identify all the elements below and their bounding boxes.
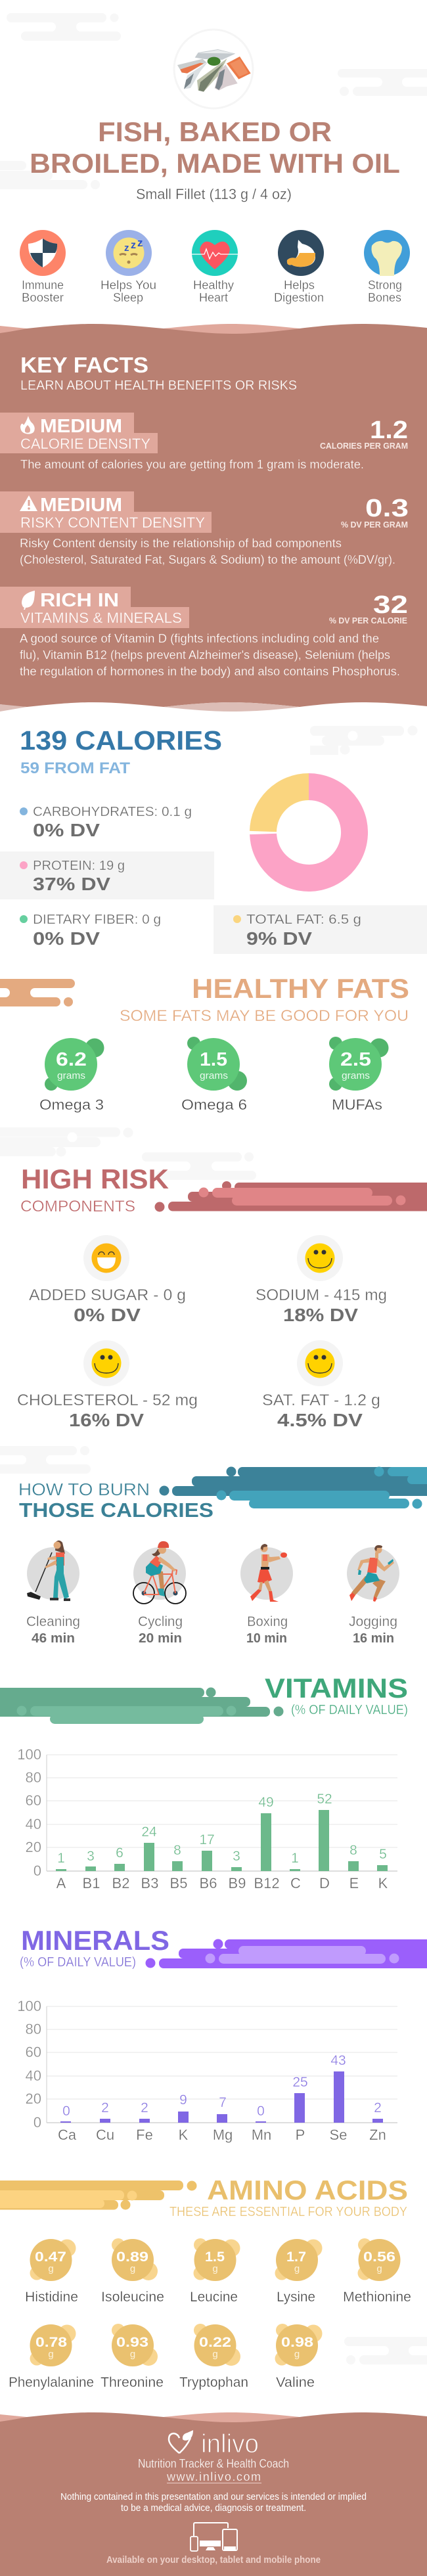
serving size: Small Fillet (113 g / 4 oz) xyxy=(136,186,292,202)
fat: mufas: 2.5 xyxy=(340,1049,371,1070)
risk: cholesterol: CHOLESTEROL - 52 mg xyxy=(17,1391,198,1409)
subheading: key facts: LEARN ABOUT HEALTH BENEFITS OR RISKS xyxy=(20,378,297,393)
panel: how to burn those calories xyxy=(18,1466,427,1646)
amino: valine: g xyxy=(294,2349,300,2360)
amino: histidine xyxy=(25,2239,78,2305)
bar chart: minerals: 43 xyxy=(330,2053,346,2068)
icon: helps you sleep face: z xyxy=(131,240,136,251)
legend: protein: 37% DV xyxy=(33,874,110,894)
amino: valine: 0.98 xyxy=(281,2335,313,2350)
bar chart: minerals: 7 xyxy=(219,2095,227,2110)
bar chart: minerals: 20 xyxy=(26,2090,41,2107)
banner: minerals xyxy=(146,1939,427,1968)
bar chart: minerals: 60 xyxy=(26,2044,41,2060)
amino: phenylalanine: g xyxy=(48,2349,54,2360)
bar chart: minerals: 0 xyxy=(34,2114,41,2131)
risk: added sugar: 0% DV xyxy=(74,1305,141,1325)
bar chart: minerals: Se xyxy=(330,2127,347,2143)
bar chart: vitamins: 1 xyxy=(57,1851,65,1866)
amino: lysine: g xyxy=(294,2263,300,2274)
amino: threonine: 0.93 xyxy=(116,2335,148,2350)
bar chart: minerals: 25 xyxy=(292,2075,308,2090)
amino: histidine: g xyxy=(48,2263,54,2274)
subheading: components: COMPONENTS xyxy=(20,1198,135,1215)
bar chart: vitamins: 6 xyxy=(116,1845,124,1861)
activity: cycling: Cycling xyxy=(138,1614,183,1629)
fat: mufas: MUFAs xyxy=(332,1096,382,1113)
bar chart: vitamins: B2 xyxy=(112,1875,129,1891)
bar chart: vitamins: B9 xyxy=(229,1875,246,1891)
bar chart: minerals: 0 xyxy=(62,2104,70,2119)
panel: key facts xyxy=(0,324,427,712)
subheading: healthy fats: SOME FATS MAY BE GOOD FOR YOU xyxy=(120,1007,409,1025)
bar chart: vitamins: K xyxy=(378,1875,388,1891)
panel: amino acids xyxy=(0,2175,411,2390)
activity: cleaning: Cleaning xyxy=(26,1614,80,1629)
amino: threonine: g xyxy=(130,2349,135,2360)
legend: dietary fiber xyxy=(20,913,161,949)
bar chart: vitamins: 5 xyxy=(379,1847,387,1862)
amino: histidine: 0.47 xyxy=(35,2249,66,2265)
risk: saturated fat: SAT. FAT - 1.2 g xyxy=(262,1391,380,1409)
activity: boxing: Boxing xyxy=(247,1614,288,1629)
icon: strong bones xyxy=(364,230,410,304)
fact: calorie density: The amount of calories you are getting from 1 gram is moderate. xyxy=(20,458,364,471)
fact: calorie density xyxy=(0,413,408,471)
activity: boxing xyxy=(240,1544,293,1646)
amino: methionine: g xyxy=(376,2263,382,2274)
banner: amino acids xyxy=(0,2181,197,2210)
icon: helps digestion stomach: Helps xyxy=(284,279,315,292)
amino: tryptophan: Tryptophan xyxy=(179,2375,248,2390)
bar chart: vitamins: B1 xyxy=(83,1875,100,1891)
donut chart xyxy=(250,773,368,892)
subheading: amino acids: THESE ARE ESSENTIAL FOR YOUR BODY xyxy=(169,2205,407,2219)
bar chart: minerals: P xyxy=(296,2127,305,2143)
bar chart: vitamins xyxy=(17,1746,397,1891)
title xyxy=(30,116,400,179)
risk: sodium: SODIUM - 415 mg xyxy=(256,1286,387,1304)
icon: strong bones: Strong xyxy=(368,279,402,292)
risk: cholesterol xyxy=(17,1340,198,1430)
banner: healthy fats xyxy=(0,979,76,1006)
amino: valine xyxy=(275,2324,322,2390)
fat: omega 6: 1.5 xyxy=(200,1049,227,1070)
heading: high risk: HIGH RISK xyxy=(21,1164,169,1194)
amino: lysine xyxy=(275,2239,322,2305)
subheading: percent of daily value: (% OF DAILY VALUE) xyxy=(291,1703,408,1717)
amino: lysine: 1.7 xyxy=(286,2249,306,2265)
amino: histidine: Histidine xyxy=(25,2290,78,2305)
disclaimer: Nothing contained in this presentation and our services is intended or implied xyxy=(60,2491,367,2502)
bar chart: vitamins: 8 xyxy=(173,1843,181,1858)
icon: helps you sleep face: z xyxy=(137,237,143,249)
risk: sodium: 18% DV xyxy=(283,1305,358,1325)
amino: leucine: g xyxy=(212,2263,218,2274)
heading: key facts: KEY FACTS xyxy=(20,353,148,377)
bar chart: vitamins: B6 xyxy=(200,1875,217,1891)
fact: rich in vitamins and minerals: VITAMINS & MINERALS xyxy=(20,610,182,626)
panel: vitamins xyxy=(0,1673,408,1891)
fact: calorie density: CALORIES PER GRAM xyxy=(320,441,408,451)
fat: mufas xyxy=(329,1037,389,1113)
fat: omega 3: Omega 3 xyxy=(39,1096,104,1113)
bar chart: vitamins: B12 xyxy=(254,1875,280,1891)
fact: risky content density: MEDIUM xyxy=(40,495,122,516)
activity: jogging: Jogging xyxy=(349,1614,397,1629)
legend: protein: PROTEIN: 19 g xyxy=(33,859,125,873)
bar chart: vitamins: 3 xyxy=(87,1849,95,1864)
bar chart: vitamins: 24 xyxy=(141,1824,157,1840)
amino: tryptophan: 0.22 xyxy=(199,2335,231,2350)
bar chart: vitamins: 40 xyxy=(26,1816,41,1832)
panel: healthy fats xyxy=(0,973,409,1113)
logo: inlivo heart xyxy=(169,2429,259,2458)
bar chart: minerals: 100 xyxy=(17,1998,41,2014)
amino: methionine: Methionine xyxy=(343,2290,411,2305)
bar chart: minerals: 2 xyxy=(141,2100,148,2115)
disclaimer xyxy=(60,2491,367,2514)
legend: carbohydrates xyxy=(20,805,192,840)
bar chart: minerals: Mn xyxy=(252,2127,271,2143)
activity: cleaning: 46 min xyxy=(32,1631,75,1646)
fact: rich in vitamins and minerals: flu), Vitamin B12 (helps prevent Alzheimer's disease), Selenium (helps xyxy=(20,648,390,662)
bar chart: vitamins: 60 xyxy=(26,1792,41,1809)
title: BROILED, MADE WITH OIL xyxy=(30,148,400,179)
amino: phenylalanine xyxy=(9,2324,94,2390)
fat: omega 3 xyxy=(39,1038,104,1113)
bar chart: minerals: Ca xyxy=(58,2127,77,2143)
legend: protein xyxy=(0,851,214,899)
risk: sodium xyxy=(256,1235,387,1325)
bar chart: vitamins: C xyxy=(290,1875,301,1891)
legend: total fat: 9% DV xyxy=(246,928,312,949)
amino: leucine: Leucine xyxy=(190,2290,238,2305)
icon: immune booster shield xyxy=(20,230,66,304)
heading: how to burn: HOW TO BURN xyxy=(18,1480,150,1499)
bar chart: minerals: Zn xyxy=(369,2127,386,2143)
fact: calorie density: CALORIE DENSITY xyxy=(20,436,150,452)
amino: isoleucine: Isoleucine xyxy=(101,2290,164,2305)
fact: risky content density: % DV PER GRAM xyxy=(341,520,408,530)
fact: rich in vitamins and minerals: 32 xyxy=(373,591,408,619)
bar chart: vitamins: B5 xyxy=(170,1875,187,1891)
fact: rich in vitamins and minerals xyxy=(0,587,408,678)
icon: fish photo in circle xyxy=(174,30,253,108)
fat: omega 6 xyxy=(181,1037,247,1113)
bar chart: vitamins: 8 xyxy=(349,1843,357,1858)
fat: omega 6: Omega 6 xyxy=(181,1096,247,1113)
amino: threonine: Threonine xyxy=(101,2375,164,2390)
heading: healthy fats: HEALTHY FATS xyxy=(192,973,409,1004)
bar chart: vitamins: 1 xyxy=(291,1851,299,1866)
icon: devices xyxy=(191,2523,237,2551)
legend: total fat: TOTAL FAT: 6.5 g xyxy=(246,913,361,927)
panel: minerals xyxy=(17,1925,427,2143)
bar chart: vitamins: 52 xyxy=(317,1792,332,1807)
amino: methionine xyxy=(343,2238,411,2305)
fat: omega 3: 6.2 xyxy=(56,1049,87,1070)
heading: amino acids: AMINO ACIDS xyxy=(207,2175,408,2205)
fat: omega 6: grams xyxy=(200,1070,228,1081)
fact: rich in vitamins and minerals: A good source of Vitamin D (fights infections including cold and the xyxy=(20,632,379,645)
title: FISH, BAKED OR xyxy=(98,116,332,147)
fact: calorie density: MEDIUM xyxy=(40,416,122,437)
bar chart: vitamins: 0 xyxy=(34,1863,41,1879)
benefit icons row xyxy=(20,230,410,304)
amino: lysine: Lysine xyxy=(277,2290,315,2305)
bar chart: minerals: 40 xyxy=(26,2068,41,2084)
fact: risky content density: (Cholesterol, Saturated Fat, Sugars & Sodium) to the amount (%DV/gr). xyxy=(20,553,395,566)
disclaimer: to be a medical advice, diagnosis or treatment. xyxy=(121,2502,306,2514)
bar chart: vitamins: B3 xyxy=(141,1875,158,1891)
icon: healthy heart: Heart xyxy=(199,291,228,304)
bar chart: vitamins: 49 xyxy=(258,1795,274,1810)
fact: calorie density: 1.2 xyxy=(370,417,408,444)
bar chart: vitamins: E xyxy=(349,1875,359,1891)
activity: cycling: 20 min xyxy=(139,1631,182,1646)
bar chart: minerals: K xyxy=(179,2127,189,2143)
icon: strong bones: Bones xyxy=(368,291,401,304)
risk: saturated fat xyxy=(262,1340,380,1430)
banner: high risk xyxy=(155,1181,427,1211)
bar chart: vitamins: 17 xyxy=(199,1832,215,1847)
activity: cleaning xyxy=(26,1541,80,1646)
activity: jogging: 16 min xyxy=(353,1631,394,1646)
fat: omega 3: grams xyxy=(57,1070,85,1081)
amino: leucine: 1.5 xyxy=(205,2249,225,2265)
heading: those calories: THOSE CALORIES xyxy=(19,1499,214,1522)
bar chart: vitamins: 80 xyxy=(26,1769,41,1786)
bar chart: minerals: 0 xyxy=(257,2104,265,2119)
bar chart: vitamins: 3 xyxy=(233,1849,240,1864)
bar chart: minerals: Mg xyxy=(213,2127,233,2143)
banner: vitamins xyxy=(0,1687,284,1724)
amino: valine: Valine xyxy=(276,2375,315,2390)
subheading: percent of daily value: (% OF DAILY VALUE) xyxy=(20,1955,136,1970)
activity: boxing: 10 min xyxy=(246,1631,287,1646)
bar chart: minerals: 80 xyxy=(26,2021,41,2037)
heading: calories: 139 CALORIES xyxy=(20,725,222,756)
subheading: calories from fat: 59 FROM FAT xyxy=(20,759,130,777)
amino: tryptophan: g xyxy=(212,2349,218,2360)
bar chart: vitamins: 20 xyxy=(26,1839,41,1855)
icon: helps you sleep face: Sleep xyxy=(113,291,143,304)
bar chart: vitamins: 100 xyxy=(17,1746,41,1763)
risk: added sugar: ADDED SUGAR - 0 g xyxy=(29,1286,186,1304)
heading: vitamins: VITAMINS xyxy=(265,1673,408,1704)
logo: inlivo heart: inlivo xyxy=(201,2429,259,2458)
panel: footer xyxy=(0,2412,427,2576)
fact: rich in vitamins and minerals: % DV PER CALORIE xyxy=(329,616,407,625)
amino: phenylalanine: Phenylalanine xyxy=(9,2375,94,2390)
icon: helps you sleep face xyxy=(101,230,156,304)
amino: threonine xyxy=(101,2324,164,2390)
icon: helps digestion stomach xyxy=(274,230,324,304)
panel: high risk components xyxy=(17,1164,427,1430)
banner: burn xyxy=(159,1466,427,1508)
icon: immune booster shield: Booster xyxy=(22,291,64,304)
icon: helps you sleep face: Helps You xyxy=(101,279,156,292)
website link: www.inlivo.com xyxy=(166,2470,261,2483)
bar chart: minerals xyxy=(17,1998,397,2143)
fact: risky content density: Risky Content density is the relationship of bad components xyxy=(20,537,342,550)
legend: dietary fiber: DIETARY FIBER: 0 g xyxy=(33,913,161,927)
amino: isoleucine: g xyxy=(130,2263,135,2274)
amino: isoleucine: 0.89 xyxy=(116,2249,148,2265)
fact: risky content density: 0.3 xyxy=(365,495,409,522)
fact: rich in vitamins and minerals: RICH IN xyxy=(40,590,119,611)
legend: carbohydrates: CARBOHYDRATES: 0.1 g xyxy=(33,805,192,819)
icon: healthy heart: Healthy xyxy=(193,279,234,292)
icon: helps digestion stomach: Digestion xyxy=(274,291,324,304)
risk: saturated fat: 4.5% DV xyxy=(277,1410,363,1430)
bar chart: vitamins: D xyxy=(319,1875,330,1891)
amino: methionine: 0.56 xyxy=(363,2249,395,2265)
activity: cycling xyxy=(133,1541,186,1646)
bar chart: minerals: Cu xyxy=(96,2127,114,2143)
tagline: Nutrition Tracker & Health Coach xyxy=(138,2457,289,2470)
bar chart: minerals: 9 xyxy=(179,2092,187,2108)
heading: minerals: MINERALS xyxy=(21,1925,169,1956)
amino: tryptophan xyxy=(179,2324,248,2390)
legend: carbohydrates: 0% DV xyxy=(33,820,100,840)
risk: added sugar xyxy=(29,1235,186,1325)
amino: isoleucine xyxy=(101,2238,164,2305)
availability note: Available on your desktop, tablet and mobile phone xyxy=(106,2554,321,2565)
fat: mufas: grams xyxy=(342,1070,370,1081)
icon: immune booster shield: Immune xyxy=(22,279,64,292)
legend: dietary fiber: 0% DV xyxy=(33,928,100,949)
activity: jogging xyxy=(347,1545,399,1646)
icon: healthy heart xyxy=(192,230,238,304)
fact: risky content density xyxy=(0,491,409,566)
icon: helps you sleep face: z xyxy=(124,242,129,254)
bar chart: minerals: Fe xyxy=(136,2127,153,2143)
legend: total fat xyxy=(214,905,427,954)
bar chart: minerals: 2 xyxy=(374,2100,382,2115)
bar chart: vitamins: A xyxy=(56,1875,66,1891)
fact: rich in vitamins and minerals: the regulation of hormones in the body) and also contains Phosphorus. xyxy=(20,665,400,678)
amino: leucine xyxy=(190,2238,240,2305)
bar chart: minerals: 2 xyxy=(101,2100,109,2115)
risk: cholesterol: 16% DV xyxy=(69,1410,144,1430)
fact: risky content density: RISKY CONTENT DENSITY xyxy=(20,514,205,531)
amino: phenylalanine: 0.78 xyxy=(35,2335,67,2350)
